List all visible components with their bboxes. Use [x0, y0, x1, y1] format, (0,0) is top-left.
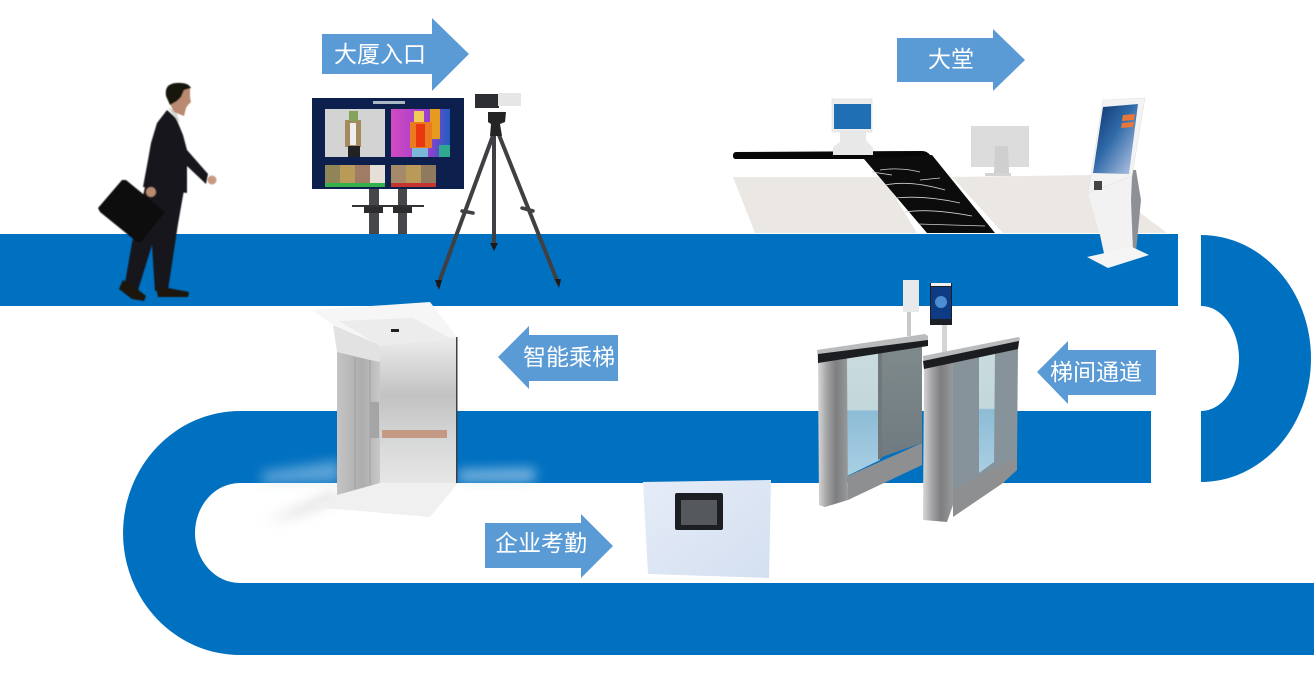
green pass snapshots	[325, 165, 385, 187]
terminal stand	[833, 132, 873, 155]
thermal camera on tripod	[435, 93, 561, 290]
desk wall left	[733, 177, 917, 233]
floor button panel	[370, 402, 379, 438]
stand	[352, 189, 424, 234]
camera dark front	[475, 94, 499, 108]
arrow label: 大厦入口	[322, 18, 469, 91]
briefcase hand	[146, 187, 156, 197]
shirt collar	[168, 108, 180, 124]
blue route path	[0, 234, 1314, 655]
arrow label: 大堂	[897, 29, 1025, 91]
arrow label: 企业考勤: 企业考勤	[495, 530, 587, 556]
tripod head	[488, 112, 506, 136]
briefcase	[98, 180, 165, 242]
arrow label: 梯间通道: 梯间通道	[1050, 359, 1142, 385]
device body	[675, 493, 723, 530]
left gate	[817, 334, 928, 507]
hand	[208, 176, 216, 184]
hair	[166, 83, 191, 105]
arrow label: 智能乘梯: 智能乘梯	[523, 344, 615, 370]
monitor back	[971, 126, 1029, 167]
monitor stand	[994, 146, 1009, 173]
door seam lines	[355, 358, 370, 490]
ceiling inner	[339, 318, 452, 346]
red alert snapshots	[391, 165, 436, 187]
white terminal	[903, 280, 919, 336]
cabin edge	[456, 337, 458, 483]
desktop face recognition terminal	[832, 99, 873, 155]
side wall	[380, 337, 456, 483]
tripod legs	[438, 130, 558, 285]
arrow label: 梯间通道	[1037, 341, 1156, 404]
desk wall right	[952, 175, 1167, 233]
monitor foot	[985, 173, 1011, 176]
route curve: right	[1201, 235, 1311, 482]
device screen	[681, 500, 717, 525]
kiosk screen	[1093, 104, 1138, 174]
route band 3: bottom	[240, 583, 1314, 655]
thermal camera panel	[391, 109, 450, 157]
arrow label: 大堂: 大堂	[928, 46, 974, 72]
kiosk dark side	[1130, 170, 1141, 252]
visible-light camera panel	[325, 109, 385, 157]
floor shadow	[265, 490, 340, 522]
desktop computer monitor (rear view)	[971, 126, 1029, 176]
head	[167, 86, 191, 116]
door header	[333, 325, 380, 362]
self-service kiosk	[1087, 98, 1149, 268]
elevator cabin	[262, 302, 535, 522]
legs	[125, 187, 184, 291]
floor mist left	[262, 460, 340, 484]
marble floor	[312, 483, 458, 517]
black counter top	[733, 151, 934, 159]
floor mist right	[458, 468, 535, 482]
jacket	[143, 110, 208, 193]
speed gate with face recognition terminals	[817, 280, 1020, 522]
route curve: left	[123, 411, 240, 655]
arrow label: 智能乘梯	[498, 326, 618, 389]
camera white body	[498, 93, 521, 106]
kiosk column	[1088, 176, 1133, 258]
right gate	[923, 337, 1020, 522]
route band 1: top	[0, 234, 1178, 306]
black terminal	[930, 283, 952, 355]
reception desk	[733, 151, 1167, 233]
ceiling sensor	[391, 329, 399, 332]
terminal body	[832, 99, 872, 132]
terminal screen	[834, 104, 871, 129]
wall-mounted attendance device	[643, 480, 771, 578]
shoes	[119, 280, 189, 301]
copper strip	[382, 430, 447, 438]
ceiling	[312, 302, 457, 345]
kiosk base	[1087, 247, 1149, 268]
header strip	[373, 101, 405, 104]
door wall	[337, 345, 380, 498]
screen	[312, 98, 464, 189]
black marble panel	[864, 155, 995, 233]
route band 2: middle	[240, 411, 1151, 483]
thermal imaging monitor on stand	[312, 98, 464, 234]
light blue panel	[643, 480, 771, 578]
walking businessman with briefcase	[98, 83, 216, 301]
marble veins	[872, 169, 985, 226]
tripod feet	[435, 243, 561, 290]
arrow label: 大厦入口: 大厦入口	[334, 41, 426, 67]
kiosk orange buttons	[1121, 114, 1135, 128]
kiosk head	[1088, 98, 1145, 193]
arrow label: 企业考勤	[485, 514, 613, 578]
kiosk reader	[1094, 181, 1102, 190]
